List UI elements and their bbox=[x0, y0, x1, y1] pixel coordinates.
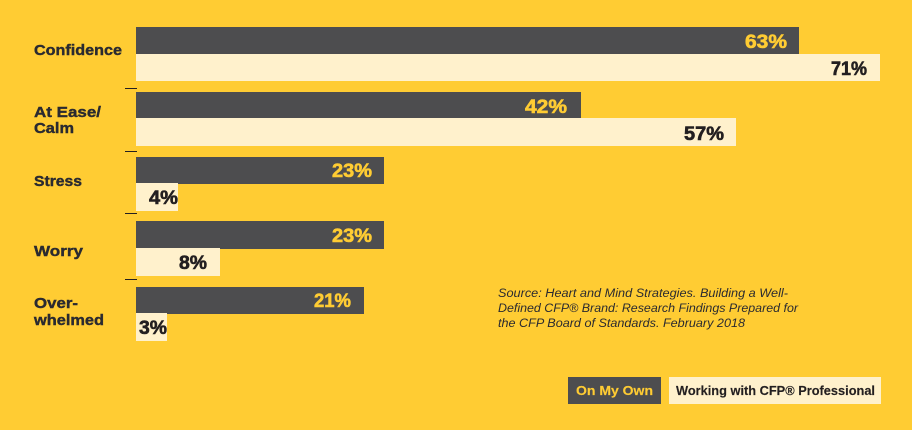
row: Confidence bbox=[34, 27, 880, 81]
bar: Worry with CFP 8%: 8% bbox=[179, 253, 207, 274]
label: Overwhelmed: Over- bbox=[34, 295, 78, 312]
bar: Overwhelmed on my own 21% bbox=[136, 287, 364, 314]
label: At Ease/Calm: Calm bbox=[34, 120, 74, 137]
bar: Overwhelmed on my own 21%: 21% bbox=[314, 291, 351, 312]
bar: At Ease on my own 42%: 42% bbox=[525, 97, 567, 118]
bar: At Ease with CFP 57%: 57% bbox=[684, 124, 724, 145]
bar: Worry on my own 23% bbox=[136, 221, 384, 249]
bar: Stress with CFP 4%: 4% bbox=[149, 188, 178, 209]
label: At Ease/Calm: At Ease/ bbox=[34, 104, 102, 121]
legend bbox=[568, 377, 881, 404]
legend: Working with CFP Professional: Working with CFP® Professional bbox=[676, 383, 875, 398]
label: Confidence: Confidence bbox=[34, 42, 122, 59]
bar: Overwhelmed with CFP 3% bbox=[136, 313, 167, 341]
source note: Source: Heart and Mind Strategies. Building a Well- bbox=[498, 288, 788, 300]
source note: the CFP Board of Standards. February 2018 bbox=[498, 318, 746, 330]
bar: Worry with CFP 8% bbox=[136, 248, 220, 276]
bar: Stress with CFP 4% bbox=[136, 183, 178, 211]
row: Stress bbox=[34, 157, 384, 211]
bar: At Ease on my own 42% bbox=[136, 92, 581, 118]
source note: Defined CFP® Brand: Research Findings Prepared for bbox=[498, 303, 799, 315]
bar: Overwhelmed with CFP 3%: 3% bbox=[139, 318, 167, 339]
label: Worry: Worry bbox=[34, 243, 84, 260]
label: Stress: Stress bbox=[34, 173, 82, 190]
bar: Confidence on my own 63% bbox=[136, 27, 799, 54]
row: Overwhelmed bbox=[33, 287, 364, 341]
legend: On My Own bbox=[568, 377, 661, 404]
bar: Confidence with CFP 71% bbox=[136, 54, 880, 81]
bar: Confidence with CFP 71%: 71% bbox=[831, 59, 867, 80]
row: At Ease/Calm bbox=[34, 92, 736, 146]
bar: Stress on my own 23% bbox=[136, 157, 384, 184]
label: Overwhelmed: whelmed bbox=[33, 312, 104, 329]
bar: Confidence on my own 63%: 63% bbox=[745, 32, 787, 53]
bar: At Ease with CFP 57% bbox=[136, 118, 736, 146]
legend: On My Own: On My Own bbox=[576, 383, 653, 398]
row: Worry bbox=[34, 221, 384, 276]
row dividers bbox=[125, 88, 137, 280]
legend: Working with CFP Professional bbox=[669, 377, 881, 404]
bar: Worry on my own 23%: 23% bbox=[332, 226, 372, 247]
bar: Stress on my own 23%: 23% bbox=[332, 161, 372, 182]
